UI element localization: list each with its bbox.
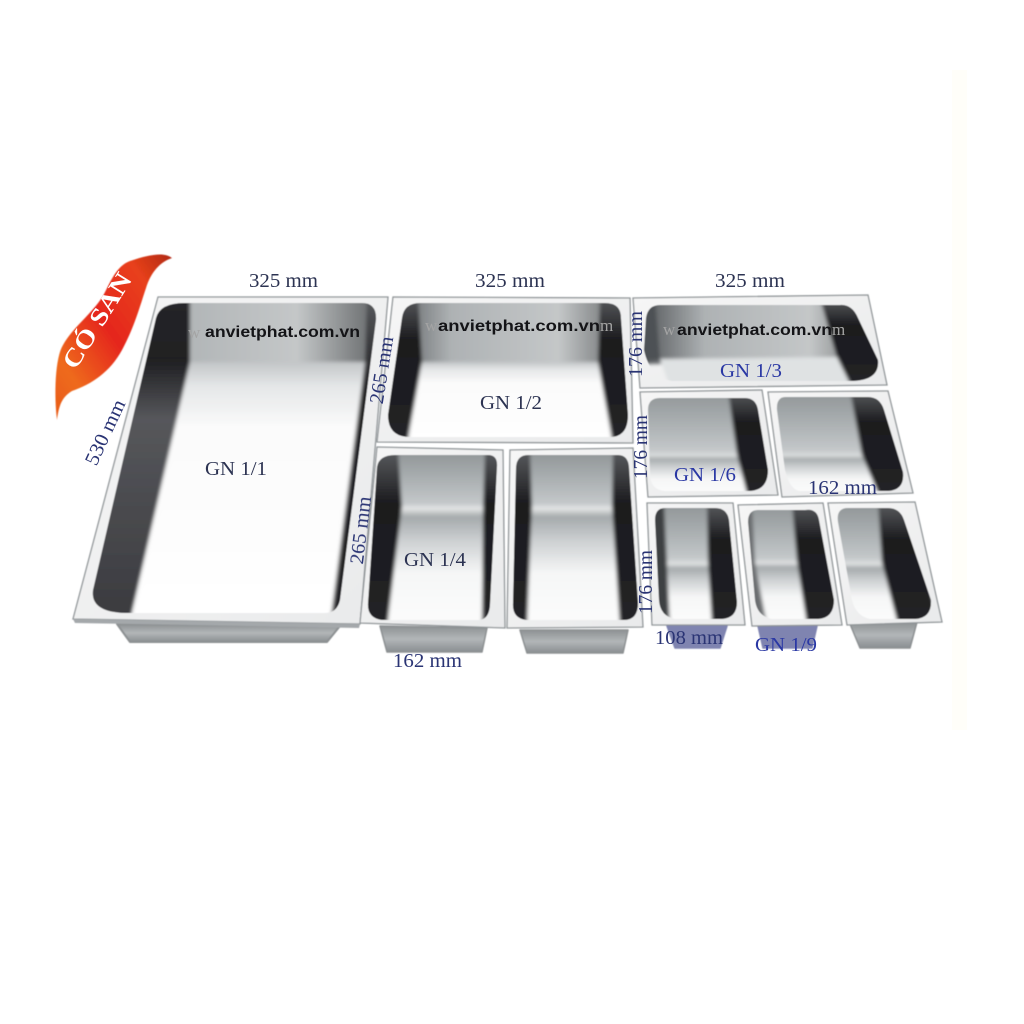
- watermark: GN 1/2: w: [425, 316, 438, 335]
- banner: CÓ SẴN: [55, 254, 172, 420]
- width label 1/3: 325 mm: [715, 270, 785, 292]
- pan label GN 1/3: GN 1/3: [720, 360, 782, 382]
- pan: GN 1/3: [633, 295, 887, 388]
- pan: GN 1/9 middle: [738, 503, 842, 648]
- watermark: GN 1/2: m: [600, 316, 613, 335]
- banner text: CÓ SẴN: [55, 266, 138, 374]
- width label 108 mm: 108 mm: [655, 627, 723, 649]
- watermark: GN 1/3: anvietphat.com.vn: [677, 322, 832, 339]
- pan: GN 1/9 left: [647, 503, 745, 648]
- pan: GN 1/1: [73, 295, 390, 642]
- pan: GN 1/6 left: [640, 390, 778, 498]
- watermark: GN 1/1: w: [188, 323, 201, 342]
- pan label GN 1/9: GN 1/9: [755, 634, 817, 656]
- depth label 176 mm GN 1/3: 176 mm: [625, 311, 647, 377]
- watermark: GN 1/2: anvietphat.com.vn: [438, 318, 600, 335]
- pan: GN 1/9 right: [828, 502, 942, 648]
- width label 162 mm upper: 162 mm: [808, 477, 877, 499]
- pan: GN 1/4 right: [505, 448, 645, 653]
- width label 1/1: 325 mm: [249, 270, 318, 292]
- watermark: GN 1/2: [425, 316, 613, 335]
- watermark: GN 1/3: m: [832, 320, 845, 339]
- depth label 265 mm upper: 265 mm: [366, 334, 398, 405]
- pan label GN 1/2: GN 1/2: [480, 392, 542, 414]
- pan label GN 1/6: GN 1/6: [674, 464, 736, 486]
- width label 1/2: 325 mm: [475, 270, 545, 292]
- width label 162 mm lower: 162 mm: [393, 650, 462, 672]
- depth label 176 mm GN 1/9: 176 mm: [635, 550, 657, 614]
- pan label GN 1/4: GN 1/4: [404, 549, 466, 571]
- watermark: GN 1/1: anvietphat.com.vn: [205, 324, 360, 341]
- pan: GN 1/6 right: [768, 390, 913, 498]
- watermark: GN 1/3: [663, 320, 845, 339]
- pan: GN 1/2: [377, 295, 635, 445]
- pan: GN 1/4 left: [360, 447, 505, 652]
- depth label 265 mm lower: 265 mm: [346, 495, 376, 565]
- depth label 530 mm: 530 mm: [81, 396, 131, 469]
- stainless steel pans: [73, 295, 942, 653]
- watermark: GN 1/3: w: [663, 320, 676, 339]
- pan label GN 1/1: GN 1/1: [205, 458, 267, 480]
- depth label 176 mm GN 1/6: 176 mm: [630, 415, 652, 479]
